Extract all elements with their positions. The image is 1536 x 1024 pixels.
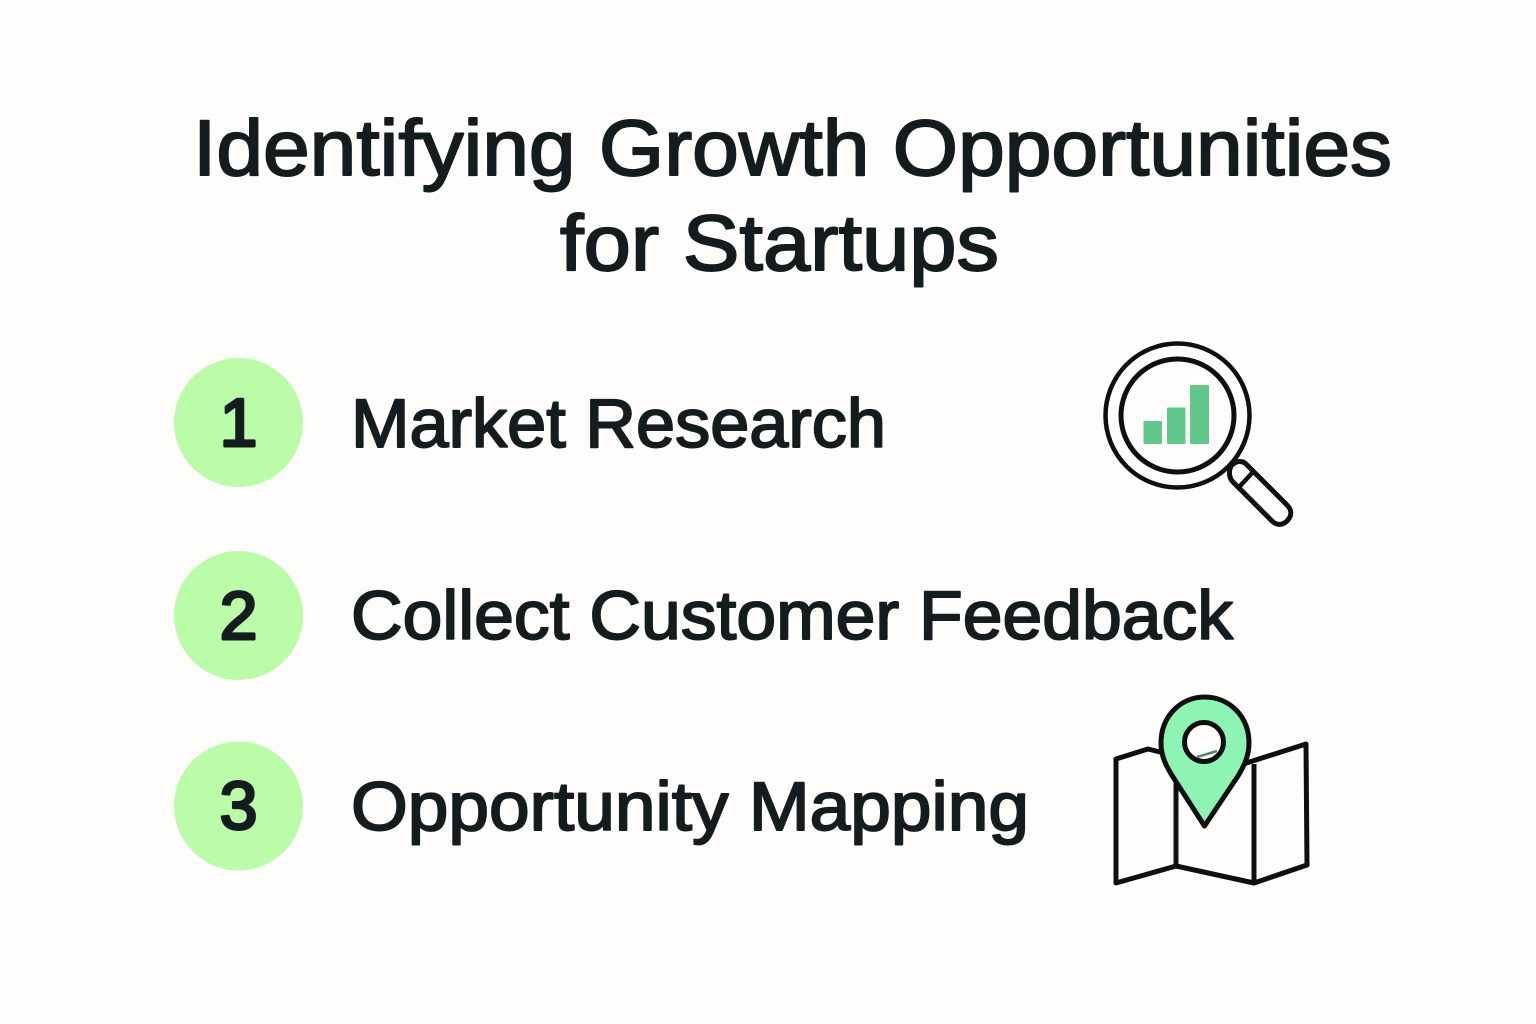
number badge 1: 1: [220, 385, 257, 461]
title: [193, 103, 1392, 287]
number badge 2: [174, 551, 303, 680]
number badge 3: [174, 742, 303, 870]
label: opportunity mapping: Opportunity Mapping: [351, 768, 1029, 845]
label: collect customer feedback: Collect Customer Feedback: [351, 577, 1234, 654]
icon: magnifying glass with bar chart: [1106, 344, 1291, 524]
step 1: market research: [174, 358, 886, 487]
icon: folded map with location pin: [1116, 697, 1307, 883]
step 3: opportunity mapping: [174, 742, 1029, 870]
number badge 3: 3: [220, 768, 257, 844]
title: for Startups: [560, 198, 999, 287]
number badge 2: 2: [220, 578, 257, 654]
label: market research: Market Research: [351, 385, 886, 462]
step 2: collect customer feedback: [174, 551, 1234, 680]
title: Identifying Growth Opportunities: [193, 103, 1392, 192]
number badge 1: [174, 358, 303, 487]
location pin: [1161, 697, 1249, 826]
